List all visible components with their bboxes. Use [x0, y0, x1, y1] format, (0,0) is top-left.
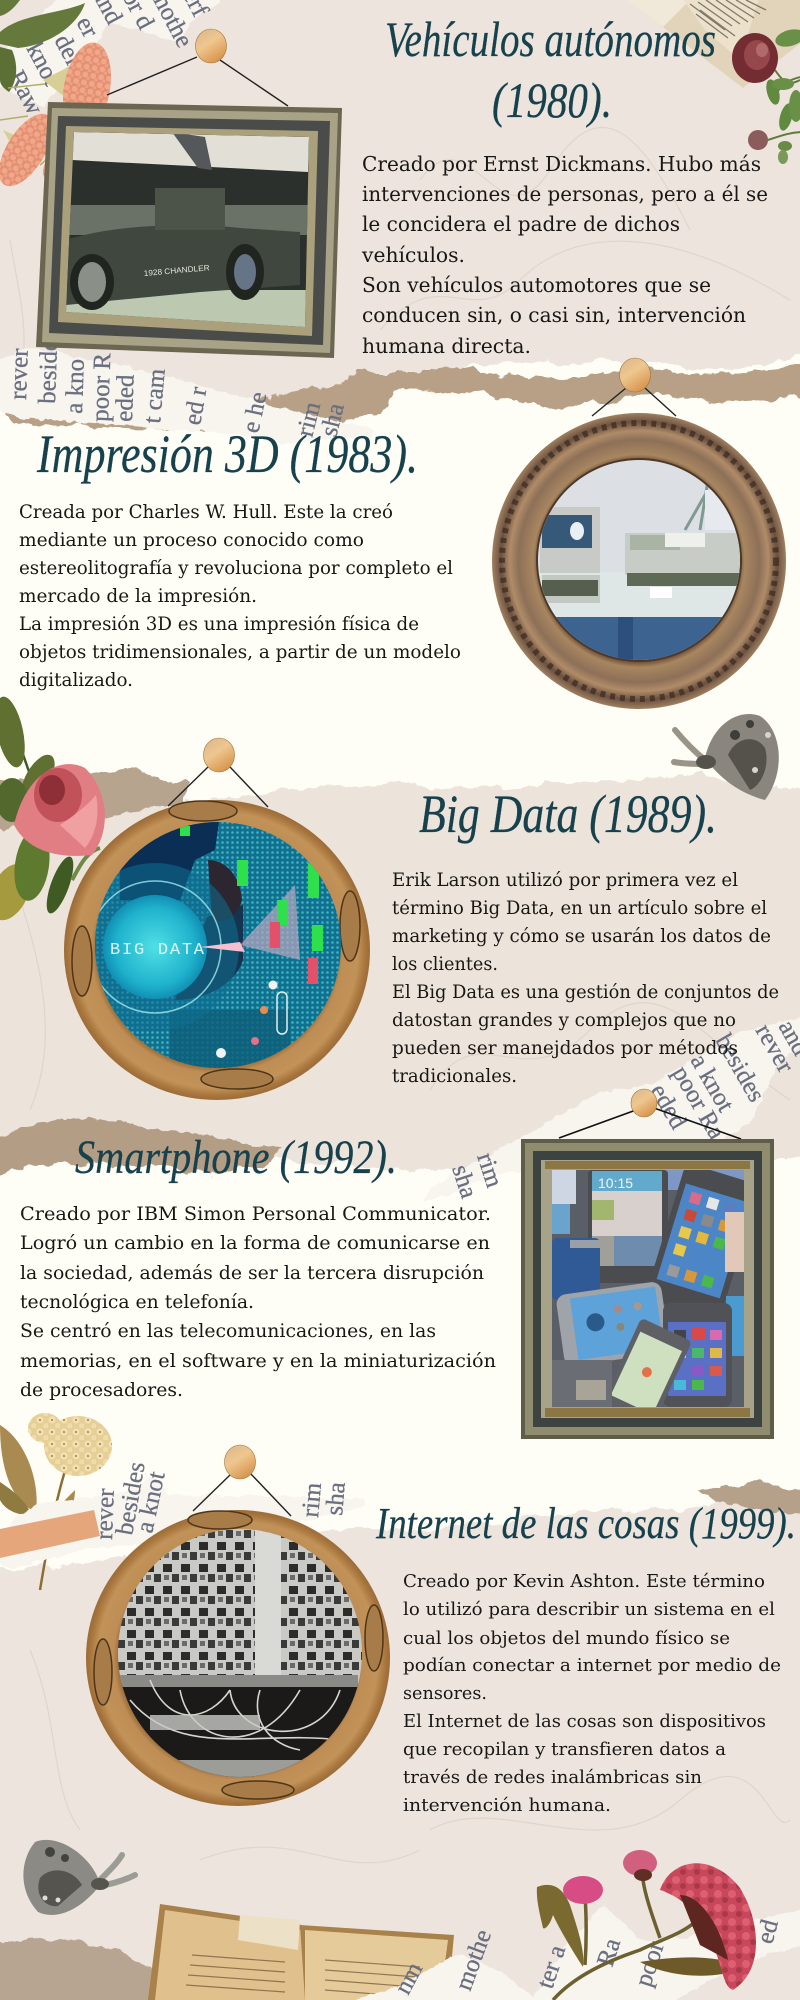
body text: conducen sin, o casi sin, intervención	[362, 303, 746, 327]
torn book page strip: section 5: besides	[111, 1460, 151, 1537]
torn book page strip: top left	[0, 0, 227, 119]
pin	[631, 1089, 657, 1117]
body text: lo utilizó para describir un sistema en el	[403, 1599, 775, 1620]
heading: Big Data (1989).	[419, 784, 717, 844]
torn book page strip: bottom right: poor	[630, 1937, 670, 1990]
body text: marketing y cómo se usarán los datos de	[392, 926, 771, 947]
gold oval frame with data photo	[64, 767, 370, 1100]
body text: tradicionales.	[392, 1066, 517, 1087]
torn book page strip: section 5: sha	[321, 1481, 351, 1517]
icon: coral flowers top left	[0, 39, 142, 195]
picture frame with car photo: 1928 CHANDLER	[143, 263, 210, 278]
body text: El Big Data es una gestión de conjuntos de	[392, 982, 779, 1003]
torn book page strip: section 5: rim	[297, 1481, 327, 1519]
heading	[385, 11, 716, 128]
torn book page strip: section 1 to 2: e he	[237, 390, 272, 435]
gold oval frame with data photo: BIG DATA	[110, 941, 205, 960]
body text	[403, 1571, 781, 1816]
torn book page strip: top left: er	[71, 12, 104, 43]
picture frame with car photo	[36, 57, 342, 358]
body text: los clientes.	[392, 954, 498, 975]
torn book page strip: section 3 to 4: eded	[645, 1080, 692, 1134]
dried yellow flowers section 4	[0, 1413, 112, 1590]
body text: mercado de la impresión.	[19, 586, 257, 607]
body text: pueden ser manejdados por métodos	[392, 1038, 738, 1059]
pin	[196, 29, 226, 63]
body text: humana directa.	[362, 334, 531, 358]
heading: Smartphone (1992).	[75, 1131, 397, 1184]
torn book page strip: bottom right: nm	[389, 1957, 429, 1999]
torn book page strip: section 3 to 4: poor Ra	[667, 1062, 730, 1144]
heading: Impresión 3D (1983).	[36, 424, 418, 484]
body text: objetos tridimensionales, a partir de un modelo	[19, 642, 461, 663]
torn book page strip: section 5: a knot	[131, 1469, 171, 1535]
panel: internet de las cosas	[86, 1445, 796, 1816]
body text	[392, 870, 779, 1087]
body text: memorias, en el software y en la miniaturización	[20, 1350, 496, 1372]
torn book page strip: section 3 to 4	[423, 1016, 800, 1202]
body text: sensores.	[403, 1683, 487, 1704]
body text: Logró un cambio en la forma de comunicarse en	[20, 1232, 490, 1254]
body text	[361, 152, 768, 358]
torn book page strip: top left: knot	[21, 38, 65, 90]
round bronze frame with lab photo	[492, 388, 786, 709]
body text: le concidera el padre de dichos	[362, 212, 680, 236]
rose and leaves: top right	[732, 26, 800, 164]
body text: digitalizado.	[19, 670, 133, 691]
torn book page strip: section 3 to 4: a knot	[685, 1050, 739, 1117]
body text: Creado por Kevin Ashton. Este término	[403, 1571, 765, 1592]
panel: big data	[64, 738, 779, 1100]
torn book page strip: section 1 to 2: sha	[316, 401, 350, 439]
body text: la sociedad, además de ser la tercera disrupción	[20, 1262, 484, 1284]
body text: de procesadores.	[20, 1379, 183, 1401]
pin	[620, 358, 650, 392]
torn book page strip: bottom right: Ra	[592, 1935, 626, 1970]
torn book page strip: section 1 to 2	[0, 339, 375, 444]
body text: cual los objetos del mundo físico se	[403, 1628, 730, 1649]
body text: vehículos.	[361, 243, 465, 267]
torn book page strip: top left: der	[49, 30, 88, 72]
open book bottom	[148, 1904, 454, 2000]
torn book page strip: section 1 to 2: t cam	[139, 367, 171, 425]
body text: Erik Larson utilizó por primera vez el	[392, 870, 738, 891]
body text: Creado por Ernst Dickmans. Hubo más	[362, 152, 761, 176]
body text: Se centró en las telecomunicaciones, en las	[20, 1320, 436, 1342]
torn book page strip: section 3 to 4: sha	[446, 1162, 482, 1202]
body text: término Big Data, en un artículo sobre el	[392, 898, 767, 919]
body text: tecnológica en telefonía.	[20, 1291, 254, 1313]
panel: vehículos autónomos	[36, 11, 768, 358]
open book corner: top right	[620, 0, 800, 88]
body text: Son vehículos automotores que se	[362, 273, 711, 297]
picture frame with phones photo: 10:15	[598, 1175, 633, 1191]
body text: intervención humana.	[403, 1795, 611, 1816]
torn book page strip: section 3 to 4: rim	[471, 1150, 508, 1191]
pressed pink flower bottom right	[537, 1850, 756, 2000]
pin	[224, 1445, 256, 1479]
torn book page strip: section 3 to 4: besides	[710, 1030, 770, 1107]
body text: intervenciones de personas, pero a él se	[362, 182, 768, 206]
body text: que recopilan y transfieren datos a	[403, 1739, 726, 1760]
body text: La impresión 3D es una impresión física de	[19, 614, 419, 635]
body text: datostan grandes y complejos que no	[392, 1010, 736, 1031]
torn book page strip: bottom right: ter a	[532, 1942, 571, 1992]
torn book page strip: section 1 to 2: rim	[292, 399, 326, 439]
icon: butterfly bottom left	[23, 1840, 135, 1915]
gold oval frame with computer photo	[86, 1473, 390, 1806]
green leaves: top left	[0, 0, 85, 92]
icon: butterfly section 3	[674, 714, 779, 800]
torn book page strip: bottom right: mothe	[450, 1926, 497, 1994]
torn book page strip: top left: Raw	[3, 66, 48, 119]
heading: (1980).	[492, 72, 612, 128]
torn book page strip: section 1 to 2: beside	[34, 339, 63, 404]
body text: estereolitografía y revoluciona por completo el	[19, 558, 453, 579]
torn book page strip: section 1 to 2: a kno	[61, 358, 90, 414]
body text	[20, 1203, 496, 1401]
panel: smartphone	[20, 1089, 774, 1439]
torn book page strip: section 1 to 2: ed r	[179, 384, 213, 427]
body text	[19, 502, 461, 691]
orange tape section 5	[0, 1510, 100, 1558]
pin	[204, 738, 234, 772]
torn book page strip: section 3 to 4: rever	[750, 1020, 799, 1078]
body text: podían conectar a internet por medio de	[403, 1655, 781, 1676]
panel: impresión 3D	[19, 358, 786, 709]
torn book page strip: bottom right	[345, 1905, 800, 2000]
body text: través de redes inalámbricas sin	[403, 1767, 702, 1788]
heading: Vehículos autónomos	[385, 11, 716, 67]
body text: Creado por IBM Simon Personal Communicator.	[20, 1203, 491, 1225]
rose and leaves: section 3 left	[0, 694, 105, 927]
torn book page strip: section 5	[0, 1460, 365, 1570]
torn book page strip: bottom right: ed	[752, 1916, 784, 1947]
body text: El Internet de las cosas son dispositivos	[403, 1711, 766, 1732]
body text: Creada por Charles W. Hull. Este la creó	[19, 502, 393, 523]
torn book page strip: section 1 to 2: rever	[5, 347, 34, 400]
torn book page strip: section 1 to 2: eded	[111, 374, 140, 422]
torn book page strip: section 5: rever	[91, 1487, 120, 1540]
body text: mediante un proceso conocido como	[19, 530, 364, 551]
torn book page strip: section 1 to 2: poor R	[87, 352, 116, 422]
picture frame with phones photo	[521, 1108, 774, 1439]
